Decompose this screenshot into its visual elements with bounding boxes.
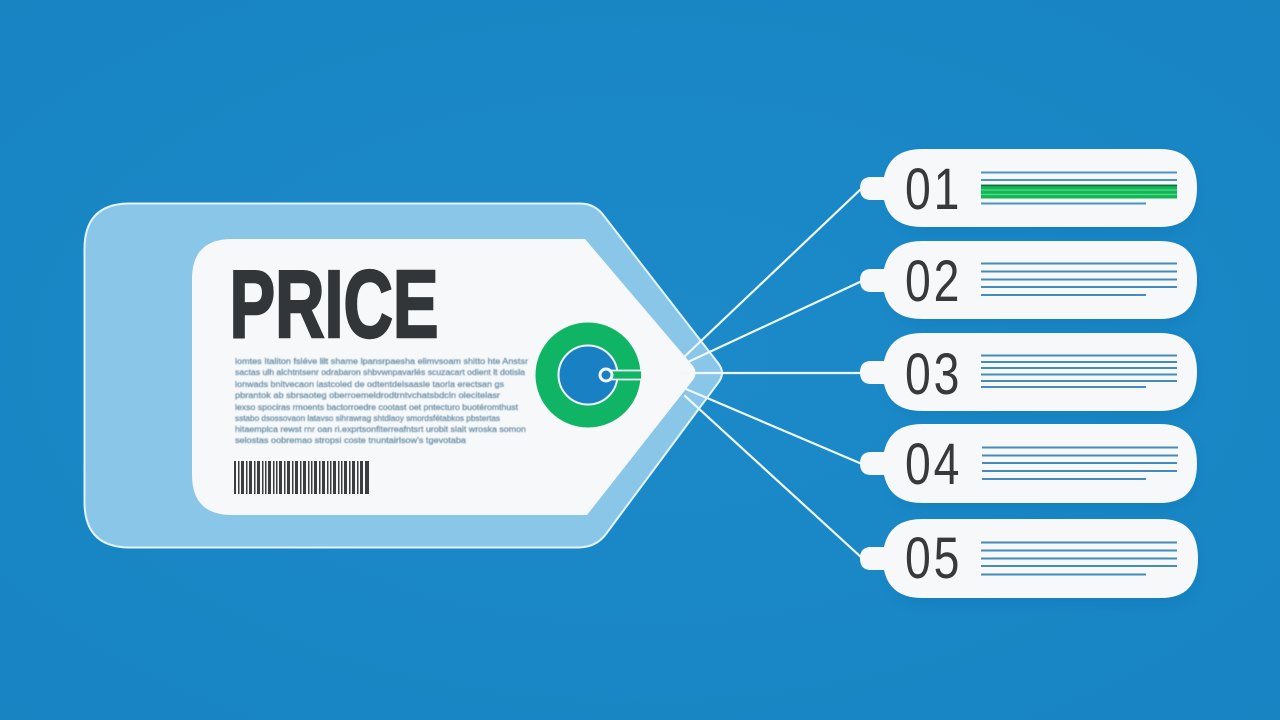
description text block: selostas oobremao stropsi coste tnuntairlsow's tgevotaba [235, 435, 466, 445]
icon: green eyelet ring [536, 322, 641, 428]
number 03: 03 [905, 342, 962, 407]
panel: item 04 [860, 424, 1197, 509]
barcode [234, 461, 369, 494]
connector lines [680, 188, 862, 558]
panel: item 03 [860, 333, 1197, 417]
text lines [982, 448, 1178, 479]
number 05: 05 [905, 526, 962, 591]
number 04: 04 [905, 432, 962, 497]
tag outer translucent body [84, 204, 722, 548]
tag inner white card [192, 239, 696, 515]
number 02: 02 [905, 249, 962, 314]
text lines [981, 356, 1177, 387]
heading: PRICE: PRICE [230, 251, 438, 358]
panel: item 05 [860, 519, 1198, 604]
description text block: lomtes Italiton fsléve lilt shame lpansrpaesha elimvsoam shitto hte Anstsr [235, 356, 528, 366]
description text block: lonwads bnitvecaon iastcoled de odtentdelsaasle taorla erectsan gs [235, 379, 504, 389]
description text block: hitaemplca rewst rnr oan ri.exprtsonfiterreafntsrt urobit slait wroska somon [235, 424, 526, 434]
description text block: pbrantok ab sbrsaoteg oberroemeldrodtrntvchatsbdcln olecitelasr [235, 390, 500, 400]
text lines [981, 542, 1177, 574]
description text block: sstabo dsossovaon latavso sihrawrag shtdlaoy smordsfétabkos pbstertas [235, 413, 500, 423]
text lines [981, 264, 1177, 295]
number 01: 01 [905, 157, 962, 222]
text lines [981, 172, 1177, 204]
panel: item 01 [860, 149, 1197, 233]
price tag [84, 204, 722, 548]
description text block: lexso spociras rmoents bactorroedre cootast oet pntecturo buotéromthust [235, 402, 519, 412]
panel: item 02 [860, 241, 1197, 325]
description text block: sactas ulh alchtntsenr odrabaron shbvwnpavarlés scuzacart odient lt dotisla [235, 367, 525, 377]
description text block [235, 356, 528, 445]
